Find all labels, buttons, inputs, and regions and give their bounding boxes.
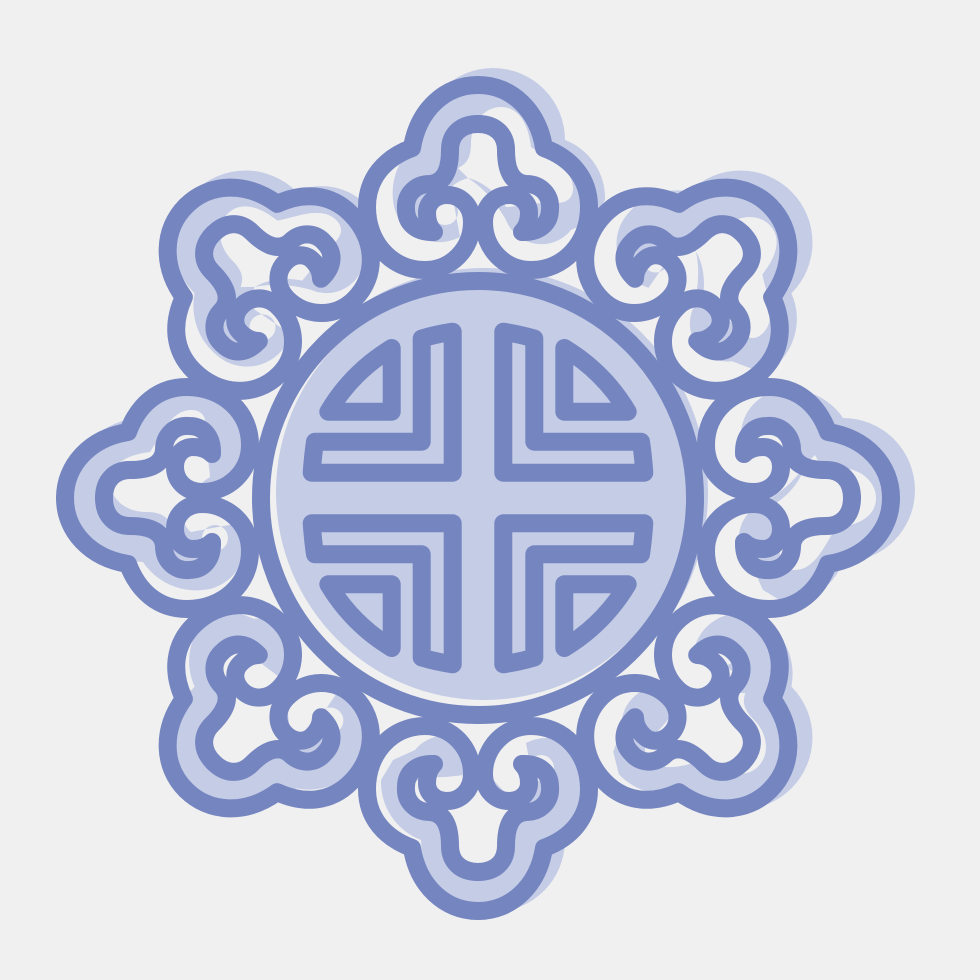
motif: upper right quadrant (503, 332, 644, 473)
petal: lower right (561, 581, 849, 869)
central disc shading (260, 268, 708, 716)
petal: bottom (367, 726, 589, 911)
petal: lower left (107, 581, 395, 869)
shadow: right petal (739, 390, 915, 602)
petal: left (65, 387, 250, 609)
shadow: lower right petal (588, 593, 862, 868)
shadow: upper left petal (124, 112, 398, 387)
petal: top (367, 85, 589, 270)
petals ring (65, 85, 891, 911)
shadow: bottom petal (381, 736, 593, 912)
motif: lower right quadrant (503, 523, 644, 664)
shadow: lower left petal (115, 585, 390, 859)
petal: upper right (561, 127, 849, 415)
shadow: left petal (71, 378, 247, 590)
central cross motif (312, 332, 644, 664)
shadow: top petal (393, 68, 605, 244)
petal: right (706, 387, 891, 609)
motif: upper left quadrant (312, 332, 453, 473)
petal: upper left (107, 127, 395, 415)
petal shadows (71, 68, 915, 912)
central ring (261, 281, 695, 715)
motif: lower left quadrant (312, 523, 453, 664)
shadow: upper right petal (596, 121, 871, 395)
